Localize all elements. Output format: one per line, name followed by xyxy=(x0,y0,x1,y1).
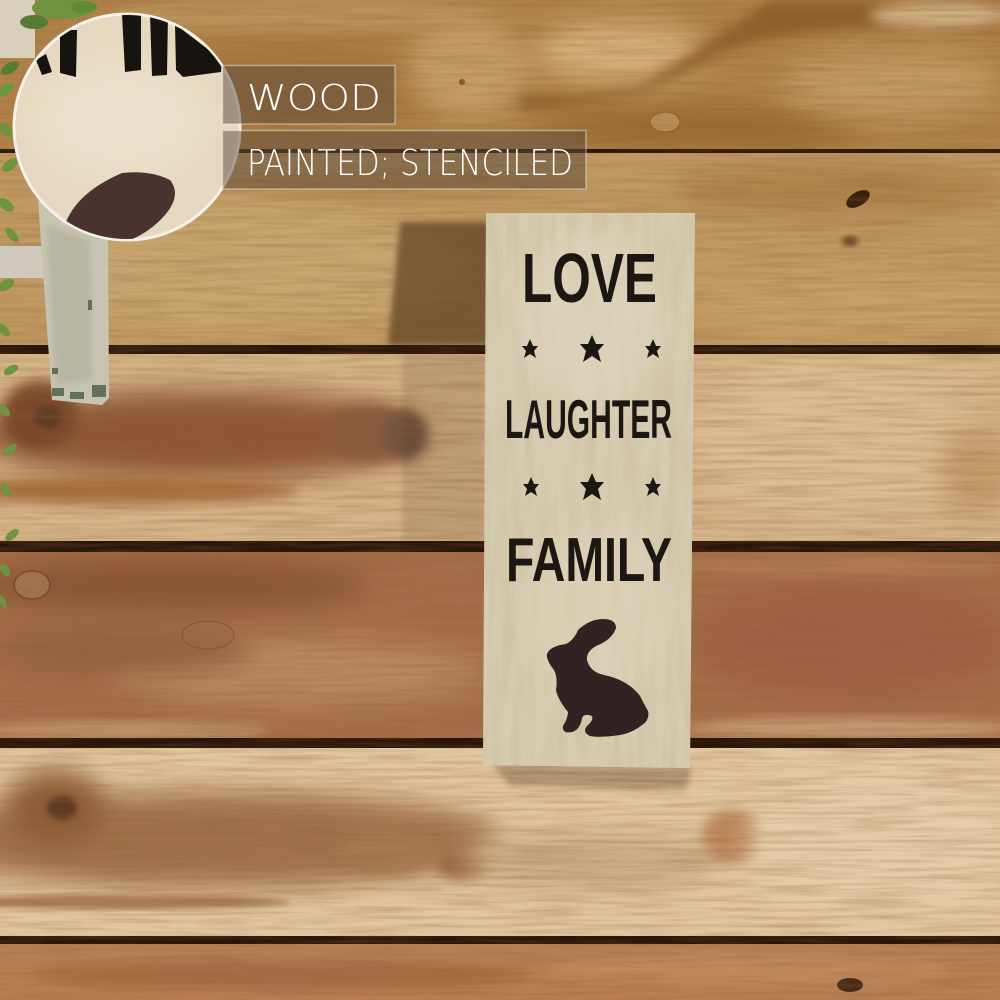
plank 3 xyxy=(0,354,1000,541)
white bracket left xyxy=(0,246,44,278)
wall shadow lower xyxy=(402,354,486,541)
label: painted; stenciled xyxy=(222,130,586,189)
label: painted; stenciled: PAINTED; STENCILED xyxy=(247,143,573,184)
rabbit silhouette xyxy=(547,619,648,737)
knots xyxy=(846,190,870,208)
sign word: laughter: LAUGHTER xyxy=(505,388,672,450)
label: wood xyxy=(222,66,395,124)
wooden sign board xyxy=(480,210,700,770)
stencil rabbit ear fragment xyxy=(66,172,175,240)
plank 5 xyxy=(0,748,1000,936)
sign shadow xyxy=(492,764,692,790)
stencil letter fragments xyxy=(36,14,222,77)
plank 6 xyxy=(0,944,1000,1000)
row of stars xyxy=(522,335,661,362)
label: wood: WOOD xyxy=(247,78,381,119)
sign word: love: LOVE xyxy=(522,239,657,317)
hanging plant xyxy=(0,0,97,610)
wall shadow beside sign xyxy=(388,222,490,345)
plank 2 xyxy=(0,153,1000,345)
plank 4 xyxy=(0,552,1000,738)
zoom detail circle xyxy=(14,14,240,240)
distressed white post xyxy=(38,200,109,405)
plank 1 xyxy=(0,0,1000,149)
white wood scrap top left xyxy=(0,0,35,58)
second row of stars xyxy=(523,473,661,500)
sign word: family: FAMILY xyxy=(506,526,672,595)
